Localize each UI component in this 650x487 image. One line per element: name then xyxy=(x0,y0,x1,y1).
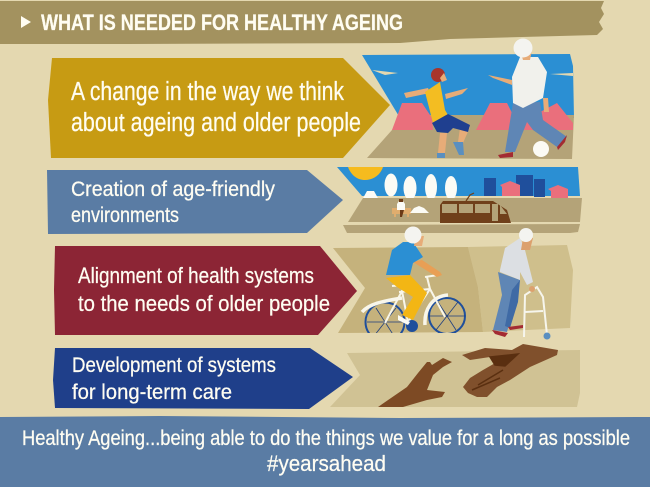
pink bushes xyxy=(392,103,433,130)
cloud xyxy=(410,206,429,213)
illustration: cycling and walker scene xyxy=(333,226,573,342)
buildings xyxy=(484,178,496,196)
icon: left hand xyxy=(378,358,452,407)
bench xyxy=(392,208,411,217)
text: long-term care: Development of systems xyxy=(72,353,276,377)
sky xyxy=(362,54,574,118)
illustration: reaching hands xyxy=(330,344,580,407)
ground xyxy=(367,115,574,159)
figure: boy xyxy=(404,68,470,158)
sun xyxy=(348,167,383,180)
panel: footer band xyxy=(0,416,650,487)
bicycle xyxy=(362,275,465,342)
tram xyxy=(440,201,511,223)
text: change in thinking: A change in the way we think xyxy=(71,78,344,106)
text: age-friendly: Creation of age-friendly xyxy=(71,178,275,201)
text: health systems: to the needs of older people xyxy=(78,291,330,316)
text: age-friendly: environments xyxy=(71,204,179,227)
figure: man with walker xyxy=(492,228,550,340)
text: hashtag: #yearsahead xyxy=(267,451,386,476)
panel: age-friendly arrow xyxy=(47,170,343,234)
panel: long-term care arrow xyxy=(53,348,353,409)
illustration: football scene xyxy=(362,38,574,159)
header band xyxy=(0,1,604,44)
text: long-term care: for long-term care xyxy=(72,380,232,404)
panel: health systems arrow xyxy=(54,246,357,335)
text: health systems: Alignment of health systems xyxy=(78,263,314,288)
panel: change in thinking arrow xyxy=(48,58,390,158)
text: change in thinking: about ageing and older people xyxy=(71,109,361,137)
sky xyxy=(337,167,580,196)
icon: right hand xyxy=(462,344,558,397)
title: WHAT IS NEEDED FOR HEALTHY AGEING xyxy=(41,10,403,35)
figure: cyclist xyxy=(386,226,442,325)
illustration: city scene xyxy=(337,167,582,233)
figure: old man xyxy=(488,38,567,158)
background xyxy=(468,245,573,332)
icon: header triangle xyxy=(21,16,31,28)
trees xyxy=(362,174,457,200)
ground xyxy=(348,198,582,222)
